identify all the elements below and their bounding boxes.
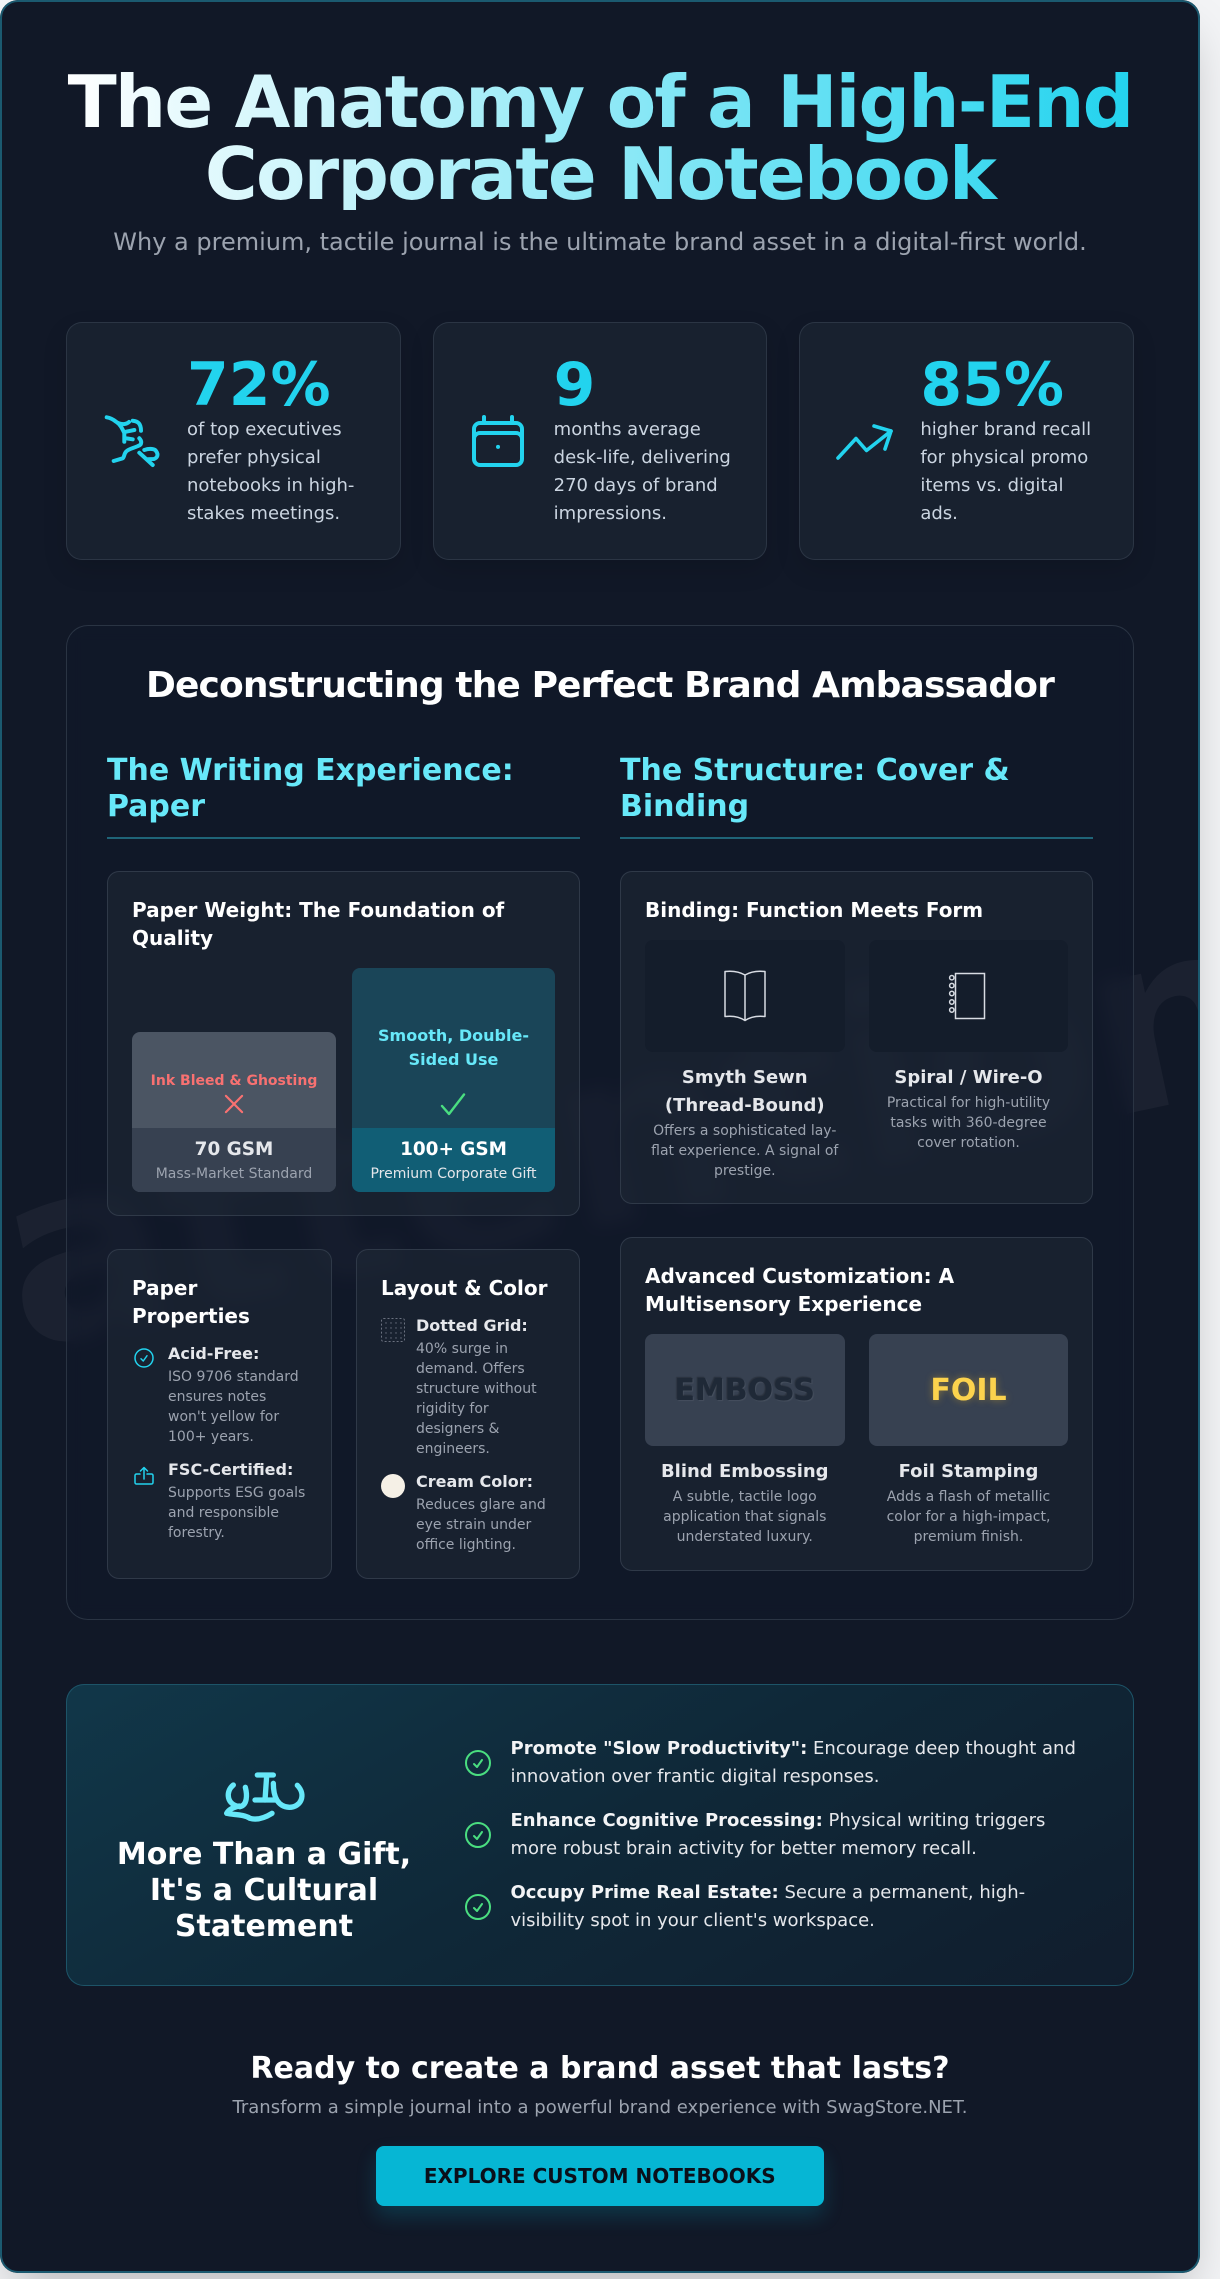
list item: slow productivity [510,1738,1076,1787]
feature title: Dotted Grid: [416,1316,528,1334]
callout: cultural statement [66,1684,1134,1986]
bar: 70 GSM [132,1032,336,1192]
stat description: months average [554,418,701,440]
tile: smyth sewn [645,940,844,1052]
icon: abstract executive [104,415,160,468]
list item: prime real estate [510,1882,1025,1931]
bar label: Sided Use [409,1050,498,1068]
list item: prime real estate: Occupy Prime Real Estate: Secure a permanent, high- [510,1882,1025,1903]
card title: Quality [132,926,213,950]
property description: ISO 9706 standard [168,1369,299,1385]
description: smyth sewn: flat experience. A signal of [651,1143,838,1159]
emboss sample: EMBOSS [674,1373,815,1408]
stat description [920,418,1091,524]
stat description [187,418,354,524]
stat description: notebooks in high- [187,475,354,496]
stat description: ads. [920,503,958,524]
callout title [117,1837,411,1944]
feature title: Cream Color: [416,1472,533,1490]
description: blind embossing: application that signals [663,1509,826,1525]
label: foil stamping: Foil Stamping [899,1461,1038,1482]
cta heading: Ready to create a brand asset that lasts? [250,2050,950,2086]
stat number: 9 [554,350,595,420]
stat description: of top executives [187,418,342,440]
icon: dotted grid [381,1318,405,1342]
description: blind embossing [663,1489,826,1545]
feature description: eye strain under [416,1516,531,1532]
property description: and responsible [168,1505,279,1521]
column heading: structure: Binding [620,789,749,824]
stat description: impressions. [554,503,667,524]
card title [132,898,504,950]
bar: 100+ GSM [352,968,555,1192]
stat description: higher brand recall [920,418,1091,440]
bar caption: Premium Corporate Gift [370,1166,537,1182]
description: spiral: Practical for high-utility [887,1095,1050,1111]
feature description: 40% surge in [416,1341,508,1357]
feature description: engineers. [416,1441,490,1457]
icon: green check [465,1750,491,1776]
property description: ensures notes [168,1389,266,1405]
icon: spiral notebook [948,972,986,1020]
tile: spiral [869,940,1068,1052]
icon: cross [224,1094,244,1114]
icon: check [440,1093,466,1116]
card: paper weight [107,871,580,1216]
call to action [232,2050,968,2222]
card title: Paper Weight: The Foundation of [132,898,504,922]
panel heading: Deconstructing the Perfect Brand Ambassador [146,664,1054,706]
icon: box with arrow [134,1466,154,1485]
callout title: Statement [175,1909,353,1944]
icon: calendar [472,415,524,467]
panel: deconstructing the brand ambassador [66,625,1134,1620]
card: binding [620,871,1093,1204]
description: spiral: tasks with 360-degree [890,1115,1047,1131]
header [68,60,1132,256]
label: blind embossing: Blind Embossing [661,1461,829,1482]
property description: Supports ESG goals [168,1485,305,1501]
feature description: Reduces glare and [416,1496,546,1512]
list item: prime real estate: visibility spot in your client's workspace. [510,1910,875,1931]
feature description: designers & [416,1421,499,1437]
list item: slow productivity: Promote "Slow Productivity": Encourage deep thought and [510,1738,1076,1759]
foil sample: FOIL [930,1373,1007,1408]
description: smyth sewn: prestige. [714,1163,776,1179]
property title: Acid-Free: [168,1344,259,1362]
list item: cognitive processing: more robust brain activity for better memory recall. [510,1838,977,1859]
bar base [132,1128,336,1192]
list item: cognitive processing: Enhance Cognitive Processing: Physical writing triggers [510,1810,1045,1831]
bar label: Ink Bleed & Ghosting [151,1073,317,1089]
feature description [416,1496,546,1552]
label: smyth sewn: (Thread-Bound) [665,1095,825,1116]
description: foil stamping [886,1489,1050,1545]
icon: abstract figure [224,1772,305,1822]
stat number: 72% [187,350,331,420]
card title: Layout & Color [381,1276,547,1300]
column heading: structure [620,753,1010,824]
icon: cream swatch [381,1474,405,1498]
callout title: It's a Cultural [150,1873,378,1908]
stat description: items vs. digital [920,475,1064,496]
feature description: structure without [416,1381,537,1397]
card: paper properties [107,1248,332,1579]
stat card: 85% [799,322,1134,560]
column heading: paper: The Writing Experience: [107,753,514,788]
description: foil stamping: color for a high-impact, [887,1509,1050,1525]
column heading: paper [107,753,514,824]
feature description: office lighting. [416,1536,516,1552]
feature description: demand. Offers [416,1361,525,1377]
bar value: 100+ GSM [400,1139,507,1160]
column heading: structure: The Structure: Cover & [620,753,1010,788]
label: smyth sewn: Smyth Sewn [682,1067,808,1088]
list item: cognitive processing [510,1810,1045,1859]
stat description: 270 days of brand [554,475,718,496]
icon: green check [465,1822,491,1848]
icon: trending up arrow [836,424,893,460]
stat card: 72% [66,322,401,560]
bar caption: Mass-Market Standard [156,1166,312,1182]
cta button [376,2146,824,2206]
subtitle: Why a premium, tactile journal is the ultimate brand asset in a digital-first world. [113,228,1087,256]
stat description: stakes meetings. [187,503,340,524]
description: spiral [887,1095,1050,1151]
feature description: rigidity for [416,1401,489,1417]
description: smyth sewn: Offers a sophisticated lay- [653,1123,836,1139]
property description: won't yellow for [168,1409,279,1425]
tile: foil [869,1334,1068,1446]
card: layout and color [356,1248,580,1579]
icon: check circle [134,1348,154,1368]
card title: Multisensory Experience [645,1292,922,1316]
bar base [352,1128,555,1192]
stat description: prefer physical [187,447,321,468]
property description [168,1369,299,1445]
stat card: 9 months [433,322,767,560]
stat description: for physical promo [920,447,1088,468]
stat description [554,418,731,524]
bar value: 70 GSM [195,1139,273,1160]
tile: emboss [645,1334,844,1446]
card title [645,1264,954,1316]
cta subtext: Transform a simple journal into a powerful brand experience with SwagStore.NET. [232,2097,968,2118]
title: The Anatomy of a High-End [68,60,1132,144]
property description: 100+ years. [168,1429,254,1445]
card title: Paper [132,1276,197,1300]
description: foil stamping: premium finish. [914,1529,1023,1545]
card title: Advanced Customization: A [645,1264,954,1288]
stat description: desk-life, delivering [554,447,731,468]
feature description [416,1341,537,1457]
label: smyth sewn [665,1067,825,1116]
title [66,66,1134,210]
card title: Properties [132,1304,250,1328]
column heading: paper: Paper [107,789,205,824]
icon: green check [465,1894,491,1920]
stat number: 85% [920,350,1064,420]
description: smyth sewn [651,1123,839,1179]
callout title: More Than a Gift, [117,1837,411,1872]
bar label [378,1026,529,1068]
title: Corporate Notebook [205,132,995,216]
button label: EXPLORE CUSTOM NOTEBOOKS [424,2164,776,2188]
property title: FSC-Certified: [168,1460,293,1478]
property description [168,1485,305,1541]
label: spiral: Spiral / Wire-O [894,1067,1043,1088]
description: blind embossing: understated luxury. [677,1529,813,1545]
description: foil stamping: Adds a flash of metallic [887,1489,1050,1505]
description: spiral: cover rotation. [917,1135,1020,1151]
list item: slow productivity: innovation over frantic digital responses. [510,1766,879,1787]
property description: forestry. [168,1525,225,1541]
card title [132,1276,250,1328]
card title: Binding: Function Meets Form [645,898,983,922]
bar label: Smooth, Double- [378,1026,529,1044]
card: advanced customization [620,1237,1093,1570]
icon: open book [724,970,766,1022]
description: blind embossing: A subtle, tactile logo [673,1489,817,1505]
